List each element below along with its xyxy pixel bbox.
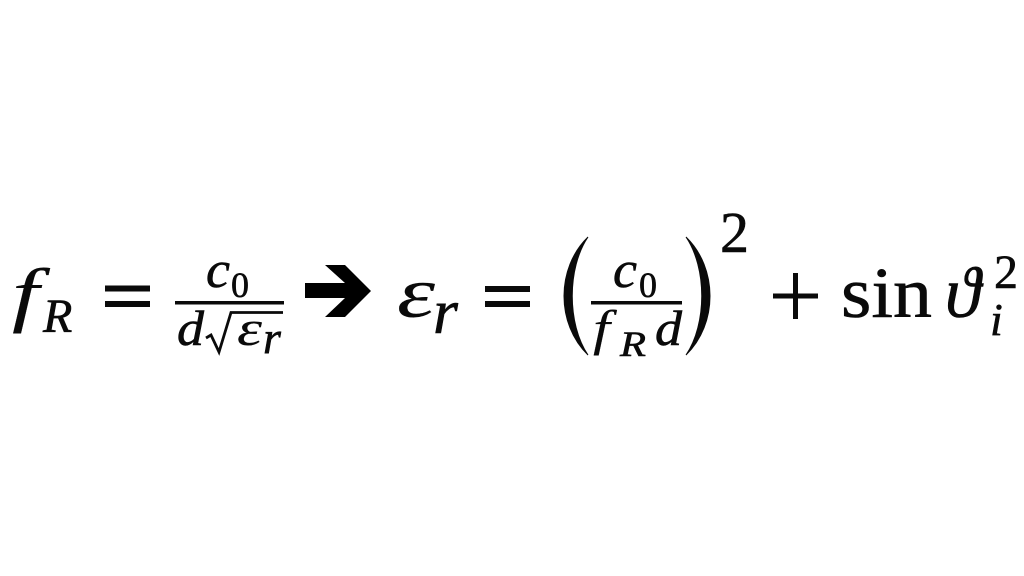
fraction: c0 over fR d: d [655,300,683,356]
fraction: c0 over fR d: R [619,324,646,364]
fraction: c0 over d root epsilon r: ε [237,300,262,356]
equals sign [105,286,150,307]
symbol: epsilon sub r: ε [397,253,436,333]
fraction: c0 over fR d: c [613,242,637,299]
fraction: c0 over d root epsilon r: r [263,312,282,363]
symbol: theta sub i squared [945,246,1018,345]
fraction: c0 over fR d: 0 [639,265,657,305]
symbol: f sub R: R [42,290,72,343]
fraction: c0 over d root epsilon r: c [206,242,230,299]
equation: resonance frequency [12,242,284,363]
sine term: sin [841,253,932,333]
symbol: theta sub i squared: ϑ [945,253,984,333]
equals sign [485,286,530,307]
plus sign [773,273,818,319]
symbol: f sub R: f [12,254,51,334]
fraction: c0 over d root epsilon r [175,242,284,363]
arrow [305,265,371,317]
equation: relative permittivity [397,200,1018,364]
symbol: f sub R [12,254,72,343]
fraction: c0 over fR d: f [593,300,617,356]
fraction: c0 over d root epsilon r: d [177,300,205,356]
exponent 2: 2 [720,200,749,265]
left parenthesis [564,237,588,355]
fraction: c0 over d root epsilon r: 0 [231,265,249,305]
symbol: epsilon sub r [397,253,459,347]
symbol: theta sub i squared: 2 [994,246,1018,299]
right parenthesis [686,237,710,355]
symbol: theta sub i squared: i [990,294,1003,345]
fraction: c0 over fR d [591,242,683,364]
symbol: epsilon sub r: r [433,276,459,347]
